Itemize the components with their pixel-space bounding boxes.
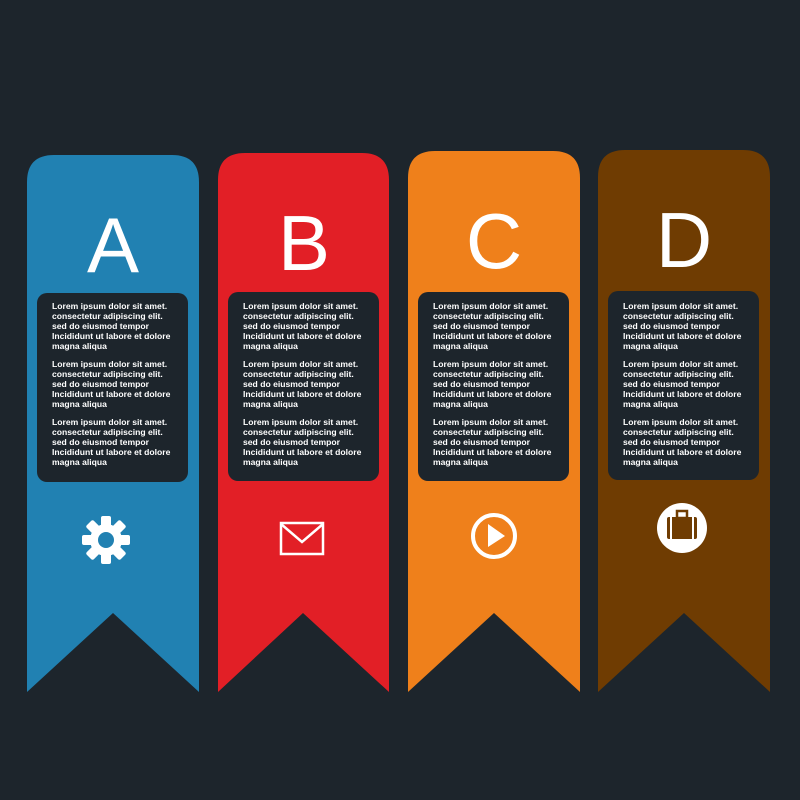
icon: gear <box>82 516 130 564</box>
text box A: Incididunt ut labore et dolore <box>52 389 170 399</box>
text box C: magna aliqua <box>433 399 488 409</box>
text box B: sed do eiusmod tempor <box>243 379 340 389</box>
text box B: magna aliqua <box>243 399 298 409</box>
text box C: magna aliqua <box>433 457 488 467</box>
text box B: consectetur adipiscing elit. <box>243 427 354 437</box>
text box C: sed do eiusmod tempor <box>433 321 530 331</box>
text box A: Lorem ipsum dolor sit amet. <box>52 301 167 311</box>
text box B: Incididunt ut labore et dolore <box>243 331 361 341</box>
text box A: consectetur adipiscing elit. <box>52 427 163 437</box>
text box A <box>37 293 188 482</box>
text box D: Lorem ipsum dolor sit amet. <box>623 359 738 369</box>
text box A: consectetur adipiscing elit. <box>52 369 163 379</box>
text box A: magna aliqua <box>52 399 107 409</box>
text box A: Lorem ipsum dolor sit amet. <box>52 417 167 427</box>
letter C: C <box>466 197 522 285</box>
text box D <box>608 291 759 480</box>
text box A: Lorem ipsum dolor sit amet. <box>52 359 167 369</box>
text box B: Lorem ipsum dolor sit amet. <box>243 417 358 427</box>
text box C: magna aliqua <box>433 341 488 351</box>
text box D: Incididunt ut labore et dolore <box>623 331 741 341</box>
text box B: magna aliqua <box>243 457 298 467</box>
text box D: Lorem ipsum dolor sit amet. <box>623 301 738 311</box>
text box D: sed do eiusmod tempor <box>623 437 720 447</box>
text box B: sed do eiusmod tempor <box>243 437 340 447</box>
text box A: sed do eiusmod tempor <box>52 321 149 331</box>
text box A: sed do eiusmod tempor <box>52 437 149 447</box>
text box D: magna aliqua <box>623 457 678 467</box>
text box C: Incididunt ut labore et dolore <box>433 389 551 399</box>
text box A: consectetur adipiscing elit. <box>52 311 163 321</box>
text box D: sed do eiusmod tempor <box>623 321 720 331</box>
ribbon D <box>598 150 770 692</box>
text box D: consectetur adipiscing elit. <box>623 427 734 437</box>
text box D: Incididunt ut labore et dolore <box>623 447 741 457</box>
text box B: Lorem ipsum dolor sit amet. <box>243 301 358 311</box>
text box C: sed do eiusmod tempor <box>433 437 530 447</box>
letter B: B <box>278 199 330 287</box>
text box D: Lorem ipsum dolor sit amet. <box>623 417 738 427</box>
text box C: Incididunt ut labore et dolore <box>433 331 551 341</box>
text box B: magna aliqua <box>243 341 298 351</box>
text box C: Lorem ipsum dolor sit amet. <box>433 417 548 427</box>
text box B: Lorem ipsum dolor sit amet. <box>243 359 358 369</box>
text box A: magna aliqua <box>52 341 107 351</box>
text box C: consectetur adipiscing elit. <box>433 427 544 437</box>
text box A: Incididunt ut labore et dolore <box>52 331 170 341</box>
text box C: consectetur adipiscing elit. <box>433 311 544 321</box>
icon: envelope <box>281 523 323 554</box>
text box D: Incididunt ut labore et dolore <box>623 389 741 399</box>
text box B: consectetur adipiscing elit. <box>243 369 354 379</box>
text box B: Incididunt ut labore et dolore <box>243 447 361 457</box>
text box D: magna aliqua <box>623 399 678 409</box>
icon: play <box>473 515 515 557</box>
text box B: sed do eiusmod tempor <box>243 321 340 331</box>
text box D: consectetur adipiscing elit. <box>623 311 734 321</box>
text box C: Lorem ipsum dolor sit amet. <box>433 359 548 369</box>
text box C: sed do eiusmod tempor <box>433 379 530 389</box>
letter A: A <box>87 201 139 289</box>
text box C <box>418 292 569 481</box>
text box C: Incididunt ut labore et dolore <box>433 447 551 457</box>
text box D: consectetur adipiscing elit. <box>623 369 734 379</box>
ribbon B <box>218 153 389 692</box>
text box B: consectetur adipiscing elit. <box>243 311 354 321</box>
text box D: sed do eiusmod tempor <box>623 379 720 389</box>
letter D: D <box>656 196 712 284</box>
icon: briefcase <box>657 503 707 553</box>
text box B: Incididunt ut labore et dolore <box>243 389 361 399</box>
text box A: Incididunt ut labore et dolore <box>52 447 170 457</box>
text box A: magna aliqua <box>52 457 107 467</box>
text box A: sed do eiusmod tempor <box>52 379 149 389</box>
ribbon C <box>408 151 580 692</box>
text box C: Lorem ipsum dolor sit amet. <box>433 301 548 311</box>
text box B <box>228 292 379 481</box>
ribbon A <box>27 155 199 692</box>
text box C: consectetur adipiscing elit. <box>433 369 544 379</box>
text box D: magna aliqua <box>623 341 678 351</box>
